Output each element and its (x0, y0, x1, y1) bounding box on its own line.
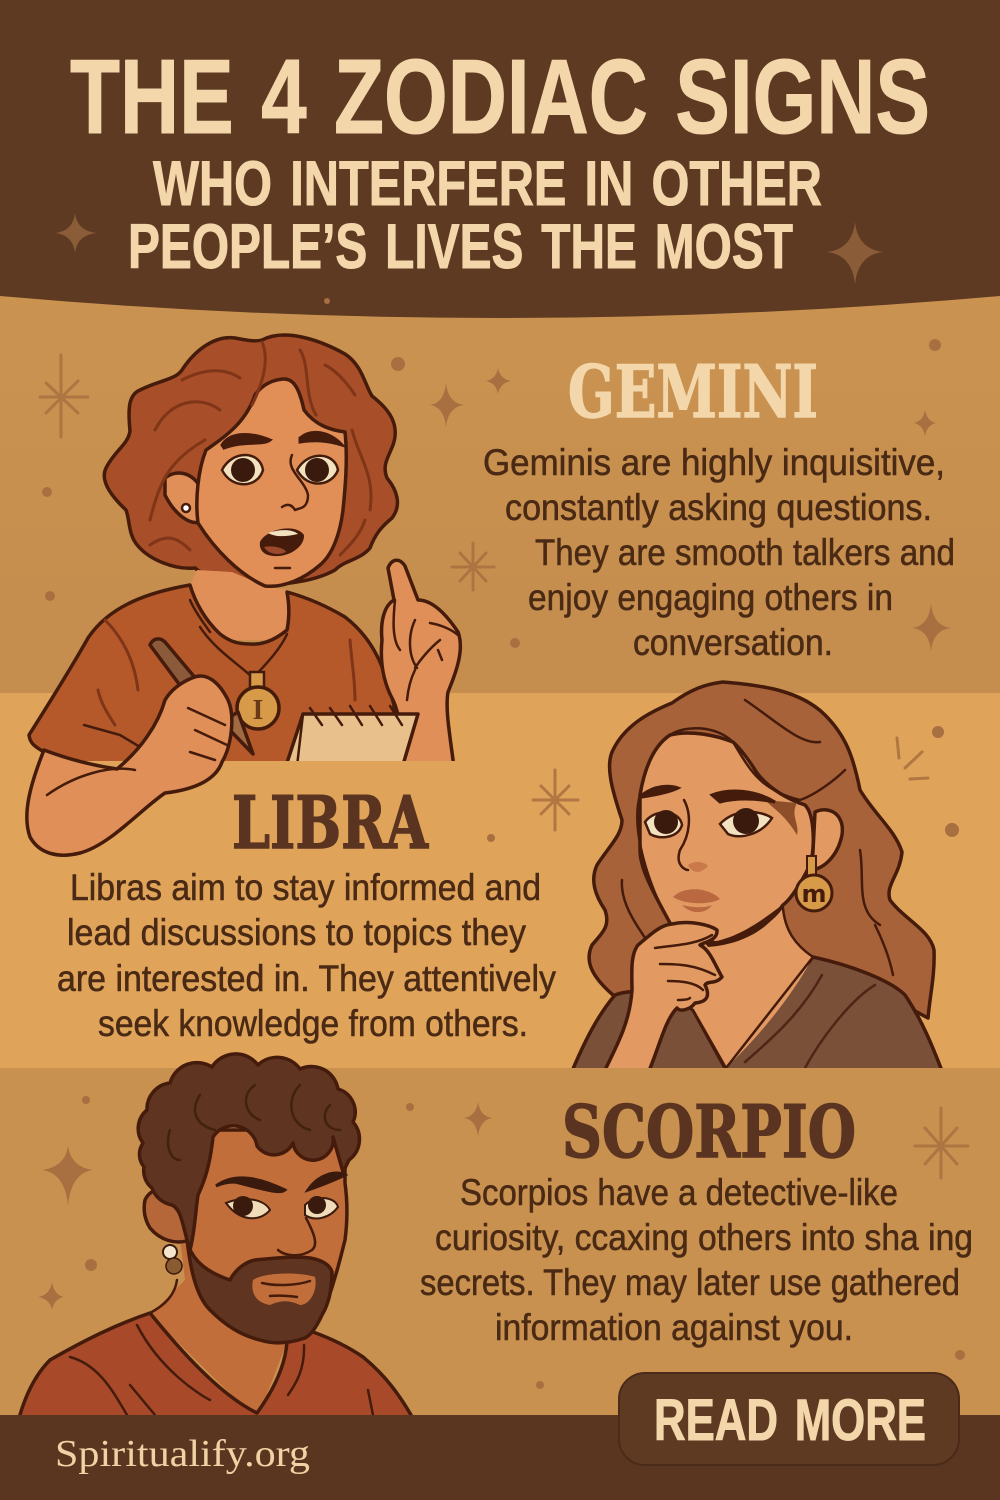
scorpio ear (144, 1189, 190, 1242)
text: gemini description: Geminis are highly inquisitive, (483, 442, 945, 483)
gemini pointing hand (381, 560, 460, 775)
text: libra description (57, 867, 556, 1044)
libra earring (796, 856, 832, 911)
gemini shirt folds (98, 620, 355, 725)
scorpio curls (168, 1085, 340, 1160)
gemini mouth (260, 528, 304, 568)
heading: scorpio: SCORPIO (562, 1089, 856, 1174)
libra nose (679, 800, 689, 870)
libra face (640, 733, 813, 943)
decorative stars and dots, scorpio panel (38, 1096, 968, 1389)
heading: libra: LIBRA (232, 780, 429, 865)
panel: header band (0, 0, 1000, 318)
gemini neck (188, 570, 290, 640)
libra jaw shadow (705, 905, 782, 947)
libra shirt (570, 957, 944, 1076)
footer site name: Spiritualify.org (55, 1433, 310, 1475)
text: gemini description: They are smooth talkers and (535, 532, 955, 573)
scorpio face (187, 1130, 347, 1325)
libra brows (642, 786, 775, 802)
libra earring: m (801, 880, 827, 908)
gemini hair back (104, 335, 397, 585)
gemini clipped body (27, 558, 462, 761)
gemini collar and chain (84, 600, 287, 753)
gemini brows (222, 432, 342, 448)
libra finger lines (655, 935, 715, 1000)
text: scorpio description (420, 1172, 973, 1348)
illustration: libra character (570, 682, 944, 1076)
scorpio brows (216, 1173, 345, 1192)
gemini medal: I (253, 695, 263, 726)
text: libra description: Libras aim to stay informed and (70, 867, 541, 908)
libra hair (589, 682, 934, 1018)
text: libra description: seek knowledge from others. (98, 1003, 528, 1044)
libra eyes (645, 808, 772, 837)
text: libra description: lead discussions to topics they (67, 912, 526, 953)
gemini hair front locks (150, 342, 371, 555)
scorpio shirt (18, 1313, 415, 1422)
scorpio neck outline and shirt folds (70, 1280, 373, 1415)
gemini finger lines (47, 708, 227, 795)
scorpio eyes (226, 1196, 338, 1218)
gemini pen (150, 639, 253, 754)
gemini ear (165, 473, 202, 523)
scorpio mouth (252, 1274, 316, 1305)
heading: gemini: GEMINI (568, 349, 818, 434)
text: gemini description: constantly asking questions. (505, 487, 932, 528)
libra neckline (693, 908, 813, 1068)
libra collar lines (745, 975, 875, 1068)
title: PEOPLE’S LIVES THE MOST (128, 212, 793, 282)
gemini fingers (394, 600, 458, 700)
libra ear (812, 810, 842, 870)
title (70, 38, 930, 282)
scorpio nose (278, 1218, 315, 1255)
decorative stars and dots, upper panels (40, 213, 959, 842)
text: gemini description: enjoy engaging others in (528, 577, 893, 618)
text: gemini description (483, 442, 955, 663)
gemini arm and writing hand (27, 676, 232, 855)
gemini shirt (27, 583, 396, 761)
panel: gemini background (0, 280, 1000, 693)
gemini notepad (286, 704, 420, 761)
panel: scorpio background (0, 1068, 1000, 1415)
scorpio neck (150, 1240, 310, 1420)
illustration: scorpio character (18, 1054, 415, 1422)
panel: libra background (0, 693, 1000, 1068)
read more button (619, 1373, 959, 1465)
text: scorpio description: information against you. (495, 1307, 853, 1348)
scorpio earring (163, 1245, 182, 1274)
footer band (0, 1415, 1000, 1500)
libra side hair (765, 800, 798, 835)
libra neck (690, 908, 813, 1068)
scorpio beard (187, 1240, 332, 1343)
title: WHO INTERFERE IN OTHER (153, 149, 822, 219)
text: libra description: are interested in. They attentively (57, 958, 556, 999)
illustration: gemini character (27, 335, 460, 855)
gemini medal (237, 672, 279, 729)
libra hand (602, 923, 722, 1076)
libra hair strands (622, 700, 893, 975)
gemini eyes (222, 455, 338, 484)
scorpio hair (138, 1054, 359, 1250)
libra mouth (673, 889, 720, 912)
gemini face (197, 379, 346, 586)
text: scorpio description: Scorpios have a detective-like (460, 1172, 898, 1213)
text: gemini description: conversation. (633, 622, 833, 663)
gemini nose (282, 455, 308, 510)
